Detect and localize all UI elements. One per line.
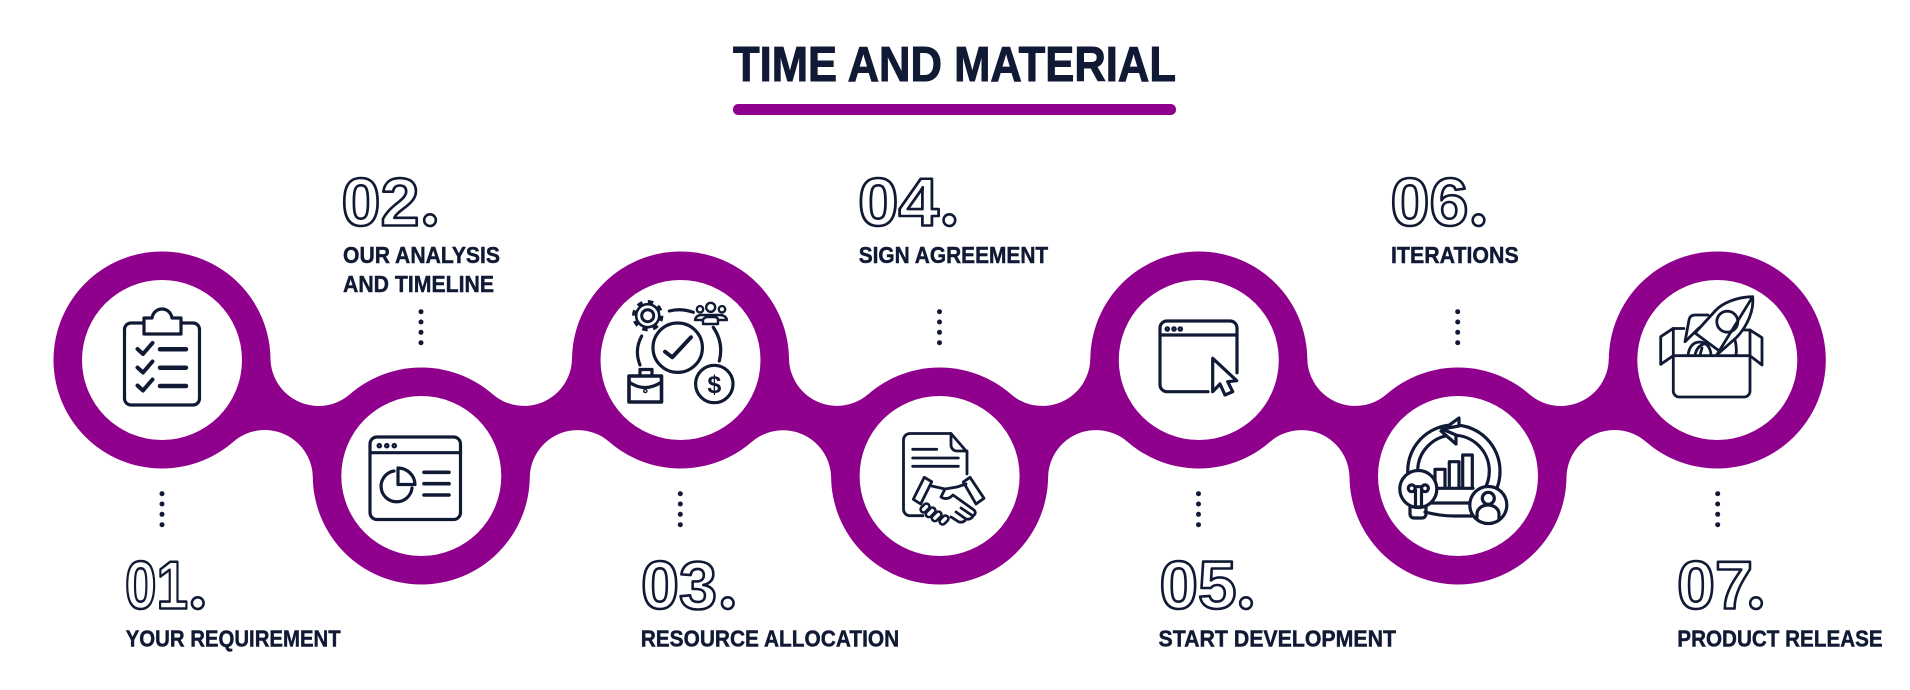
node circle [1119, 280, 1279, 440]
step 02: our analysis and timeline [341, 161, 501, 556]
label: START DEVELOPMENT [1158, 626, 1396, 652]
label: RESOURCE ALLOCATION [641, 626, 899, 652]
node circle [1637, 280, 1797, 440]
icon: browser window with cursor [1160, 321, 1237, 395]
dotted connector [1455, 309, 1460, 345]
dotted connector [1715, 491, 1720, 527]
title underline bar [733, 104, 1176, 115]
number 04: . [940, 161, 958, 241]
number 07: 07 [1677, 548, 1753, 624]
dotted connector [678, 491, 683, 527]
step 04: sign agreement [858, 161, 1048, 556]
number 07: . [1747, 544, 1765, 624]
number 01: . [189, 544, 207, 624]
node circle [341, 396, 501, 556]
dotted connector [160, 491, 164, 527]
node circle [600, 280, 760, 440]
title: TIME AND MATERIAL [733, 38, 1176, 92]
icon: clipboard checklist [124, 309, 200, 405]
step 03: resource allocation [600, 280, 899, 652]
number 02: 02 [342, 164, 420, 240]
number 02: . [421, 161, 439, 241]
step 06: iterations [1378, 161, 1538, 556]
step 05: start development [1119, 280, 1396, 652]
label: SIGN AGREEMENT [859, 242, 1048, 268]
icon: gear, team, money, briefcase around a check [629, 302, 733, 403]
icon: browser window with pie chart [370, 437, 460, 520]
number 05: 05 [1160, 548, 1236, 624]
node circle [82, 280, 242, 440]
number 03: . [719, 544, 737, 624]
icon: iteration cycle with chart, idea and person [1400, 418, 1507, 524]
ribbon: purple connected rings [54, 252, 1826, 584]
node circle [1378, 396, 1538, 556]
label: YOUR REQUIREMENT [126, 626, 341, 652]
number 06: 06 [1390, 164, 1468, 240]
label: OUR ANALYSIS [343, 242, 500, 268]
node circle [860, 396, 1020, 556]
number 03: 03 [641, 548, 717, 624]
label [343, 242, 500, 297]
icon: gear, team, money, briefcase around a check: $ [707, 371, 721, 399]
label: AND TIMELINE [343, 271, 494, 297]
number 05: . [1237, 544, 1255, 624]
number 06: . [1470, 161, 1488, 241]
icon: rocket in open box [1661, 297, 1762, 397]
dotted connector [418, 309, 424, 345]
step 07: product release [1637, 280, 1883, 652]
number 01: 01 [125, 548, 188, 624]
dotted connector [937, 309, 942, 345]
label: ITERATIONS [1391, 242, 1519, 268]
label: PRODUCT RELEASE [1677, 626, 1883, 652]
icon: contract and handshake [903, 434, 984, 526]
number 04: 04 [858, 164, 939, 240]
step 01: your requirement [82, 280, 341, 652]
dotted connector [1196, 491, 1201, 527]
